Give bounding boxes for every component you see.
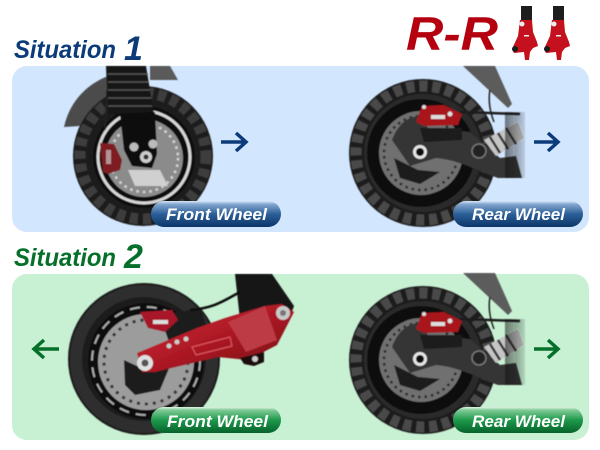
heading: situation 2: Situation (14, 244, 116, 272)
label: front wheel: Front Wheel (166, 205, 268, 224)
heading: situation 1: Situation (14, 36, 116, 64)
arrow: left, situation 2 front (34, 340, 59, 358)
heading number: 1: 1 (124, 30, 143, 68)
icon: brake caliper right (544, 6, 570, 60)
panel: situation 1 (12, 66, 589, 232)
arrow: right, situation 1 front (221, 133, 246, 151)
rear wheel photo: situation 2 (349, 273, 525, 434)
label: front wheel (151, 201, 281, 227)
label: front wheel (151, 407, 281, 433)
rear wheel photo: situation 1 (349, 66, 525, 227)
front wheel photo: situation 1 (64, 66, 213, 226)
heading: R-R: R-R (406, 7, 498, 60)
heading number: 2: 2 (123, 238, 143, 276)
label: front wheel: Front Wheel (167, 412, 269, 431)
front wheel photo: situation 2 (68, 274, 294, 435)
label: rear wheel (453, 201, 583, 227)
panel: situation 2 (12, 273, 589, 440)
label: rear wheel: Rear Wheel (472, 412, 566, 431)
arrow: right, situation 1 rear (534, 133, 558, 151)
arrow: right, situation 2 rear (534, 340, 558, 358)
label: rear wheel: Rear Wheel (472, 205, 566, 224)
label: rear wheel (453, 407, 583, 433)
icon: brake caliper left (512, 6, 538, 60)
